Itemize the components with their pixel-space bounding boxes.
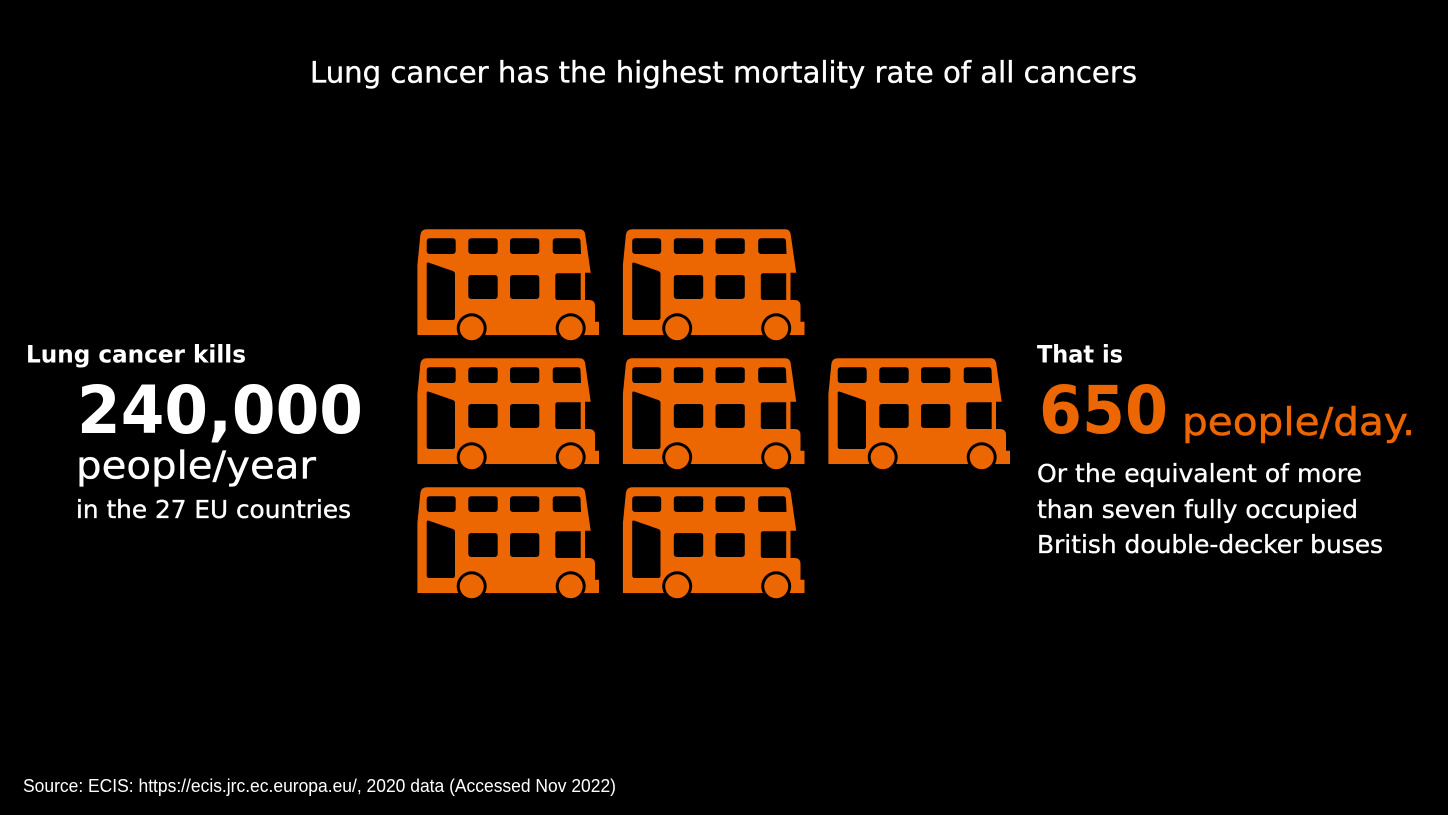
icon: bus 1	[417, 229, 599, 343]
icon: bus 6	[417, 487, 599, 601]
number: 650: 650	[1039, 372, 1168, 449]
icon: bus 2	[623, 229, 804, 343]
unit: people per day: people/day.	[1182, 400, 1415, 444]
description: bus equivalent: British double-decker buses	[1037, 530, 1383, 559]
icon: bus 4	[623, 358, 804, 472]
lead-in: lung cancer kills: Lung cancer kills	[26, 341, 246, 369]
lead-in: that is: That is	[1037, 341, 1123, 369]
scope: EU countries: in the 27 EU countries	[76, 495, 351, 524]
icon: bus 3	[417, 358, 599, 472]
icon: bus 7	[623, 487, 804, 601]
icon: bus 5	[828, 358, 1010, 472]
source note: Source: ECIS: https://ecis.jrc.ec.europa.eu/, 2020 data (Accessed Nov 2022)	[23, 776, 616, 796]
pictogram: double-decker buses	[417, 229, 1010, 601]
description: bus equivalent: Or the equivalent of more	[1037, 459, 1362, 488]
description: bus equivalent: than seven fully occupied	[1037, 495, 1358, 524]
title: Lung cancer has the highest mortality rate of all cancers	[310, 56, 1137, 90]
description: bus equivalent	[1037, 459, 1383, 559]
unit: people per year: people/year	[76, 444, 316, 488]
panel: right statistic	[1037, 341, 1415, 559]
panel: left statistic	[26, 341, 363, 524]
number: 240,000: 240,000	[77, 372, 363, 449]
